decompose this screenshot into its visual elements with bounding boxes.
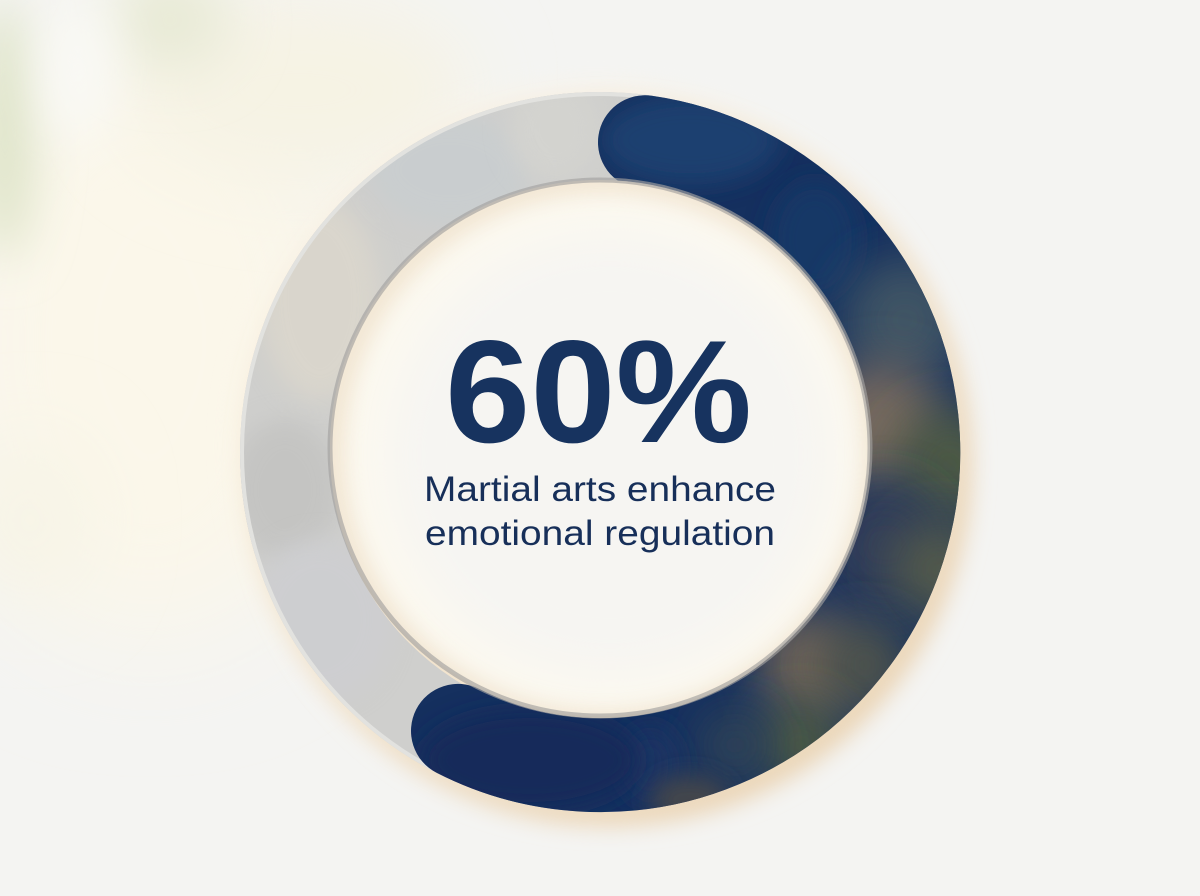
headline value: 60%	[445, 310, 752, 473]
caption: Martial arts enhance	[424, 470, 776, 509]
infographic	[0, 0, 982, 836]
donut value arc: 60%	[420, 95, 1006, 824]
ring glow and drop shadow	[232, 82, 970, 824]
centre disc	[330, 180, 875, 724]
donut track: remaining 40%	[240, 92, 812, 812]
caption	[424, 470, 776, 553]
caption: emotional regulation	[425, 514, 775, 553]
